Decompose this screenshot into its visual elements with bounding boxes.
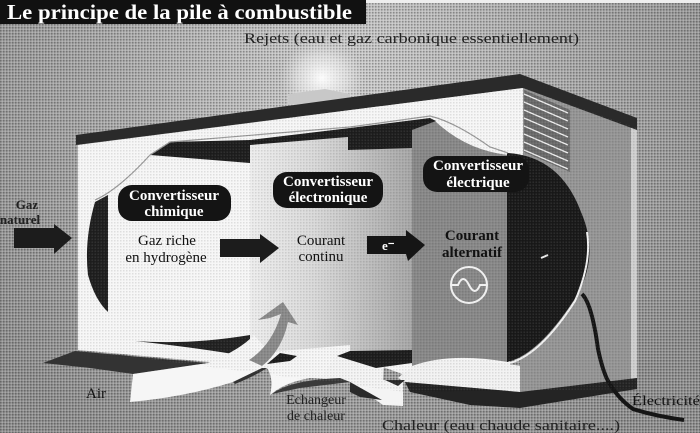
- arrow: electrons: [367, 230, 425, 261]
- lower outflow dark edge: [350, 380, 405, 400]
- dark panel: electric converter interior: [507, 153, 590, 362]
- white lower wave: [398, 360, 520, 392]
- top outline: [95, 116, 508, 200]
- badge: convertisseur chimique: chimique: [144, 204, 204, 220]
- air stream dark edge: [233, 368, 267, 384]
- base dark edge: [405, 378, 637, 408]
- arrow: electrons: e⁻: [382, 238, 395, 253]
- lower chemical dark crescent: [135, 335, 250, 354]
- label: échangeur de chaleur: Echangeur: [286, 393, 346, 408]
- oval outline: [510, 232, 588, 363]
- appliance: [43, 74, 684, 420]
- badge: convertisseur électrique: électrique: [446, 175, 510, 191]
- electric cable: [582, 294, 684, 420]
- badge: convertisseur électronique: Convertisseur: [283, 174, 373, 190]
- text: courant continu: Courant: [297, 233, 346, 249]
- white front face: [78, 88, 523, 375]
- dark top wedge: [150, 118, 436, 163]
- left dark crescent: [87, 195, 108, 312]
- air arrow: [249, 302, 298, 366]
- text: courant continu: continu: [298, 249, 344, 265]
- text: gaz riche: Gaz riche: [138, 233, 196, 249]
- ventilation louvers: [524, 94, 568, 169]
- badge: convertisseur électrique: [423, 156, 529, 192]
- arrow: hydrogène: [220, 234, 279, 263]
- top edge strip: [366, 0, 700, 3]
- socket: [541, 255, 548, 258]
- badge: convertisseur électronique: électronique: [289, 190, 368, 206]
- exchanger dark top: [337, 350, 412, 368]
- right corner strip: [631, 126, 637, 379]
- white air stream: [130, 335, 350, 402]
- exchanger dark blob: [272, 378, 350, 394]
- title: Le principe de la pile à combustible: [7, 0, 352, 24]
- text: courant alternatif: Courant: [445, 228, 499, 244]
- exhaust vent: [288, 89, 350, 104]
- label: gaz naturel: Gaz: [16, 197, 38, 212]
- label: air: Air: [86, 386, 106, 402]
- badge: convertisseur chimique: [118, 185, 231, 221]
- smoke plume: [280, 40, 364, 116]
- arrow: gaz naturel: [14, 224, 72, 254]
- label: gaz naturel: naturel: [0, 212, 40, 227]
- right side face: [520, 88, 637, 392]
- text: gaz riche: en hydrogène: [125, 250, 207, 266]
- badge: convertisseur électronique: [273, 172, 383, 208]
- heat exchanger dark wedge: [267, 353, 297, 364]
- text: courant alternatif: alternatif: [442, 245, 503, 261]
- badge: convertisseur chimique: Convertisseur: [129, 188, 219, 204]
- left bottom shadow wedge: [43, 351, 208, 374]
- centre panel: electronic converter: [250, 130, 412, 362]
- label: échangeur de chaleur: de chaleur: [287, 409, 345, 424]
- white heat outflow: [320, 358, 403, 406]
- right panel: electric converter: [412, 120, 508, 366]
- badge: convertisseur électrique: Convertisseur: [433, 158, 523, 174]
- roof edge: [76, 74, 637, 145]
- label: rejets: Rejets (eau et gaz carbonique essentiellement): [244, 31, 579, 47]
- halftone on appliance: [78, 88, 637, 392]
- label: électricité: Électricité: [632, 392, 700, 409]
- icon: alternating current: [451, 267, 487, 303]
- louver panel: [524, 90, 570, 172]
- title bar: [0, 0, 366, 24]
